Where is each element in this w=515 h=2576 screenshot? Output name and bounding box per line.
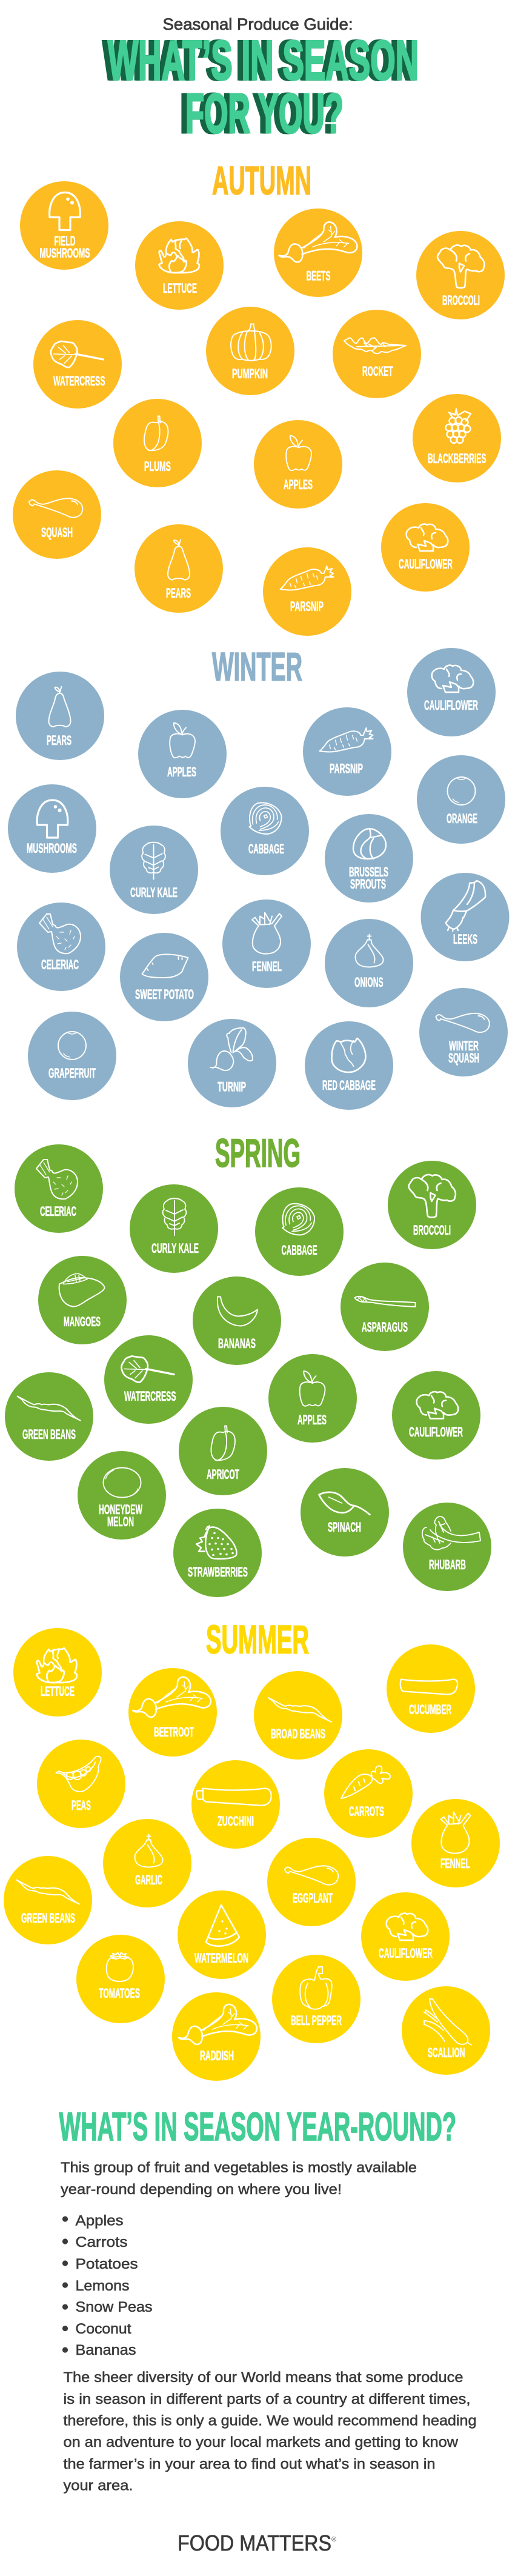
label: FIELD [55, 233, 75, 249]
icon: mushroom [37, 800, 68, 838]
item: cauliflower [361, 1892, 450, 1981]
item: cabbage [255, 1187, 344, 1276]
icon: raddish [179, 2004, 257, 2044]
item: apples [138, 710, 227, 798]
icon: cucumber [400, 1679, 457, 1695]
label: CARROTS [349, 1804, 384, 1819]
icon: cauliflower [387, 1914, 428, 1940]
icon: apple [170, 722, 195, 758]
section: spring [5, 1130, 491, 1597]
label: WATERCRESS [124, 1389, 176, 1404]
icon: rocket [344, 338, 406, 353]
icon: brussels sprout [353, 829, 386, 859]
closing paragraph: on an adventure to your local markets and getting to know [63, 2434, 459, 2451]
heading: Spring: SPRING [215, 1130, 301, 1175]
closing paragraph: therefore, this is only a guide. We would recommend heading [63, 2412, 476, 2429]
item: grapefruit [28, 1012, 116, 1100]
item: squash [13, 470, 101, 559]
item: orange [417, 755, 505, 844]
label: CAULIFLOWER [409, 1424, 463, 1440]
item: pears [16, 672, 104, 760]
icon: broccoli [408, 1175, 456, 1217]
item: mangoes [38, 1256, 127, 1344]
label: ONIONS [354, 975, 383, 990]
icon: broad beans [268, 1698, 331, 1722]
label: SQUASH [41, 525, 73, 540]
label: PLUMS [144, 459, 171, 474]
item: tomatoes [76, 1935, 165, 2023]
item: cabbage [221, 787, 309, 875]
item: honeydew melon [78, 1451, 166, 1540]
icon: watercress [121, 1356, 174, 1383]
icon: rhubarb [422, 1517, 480, 1550]
label: APPLES [284, 477, 313, 492]
icon: lettuce [36, 1648, 77, 1683]
logo: Food Matters: FOOD MATTERS [178, 2531, 331, 2555]
item: beets [274, 209, 362, 297]
item: green beans [4, 1856, 92, 1944]
item: broccoli [416, 231, 505, 319]
icon: celeriac [39, 914, 81, 953]
icon: pear [168, 539, 190, 579]
label: ROCKET [362, 364, 393, 379]
label: TOMATOES [99, 1986, 140, 2001]
label: MUSHROOMS [27, 841, 77, 856]
item: field mushrooms [20, 181, 108, 270]
item: pumpkin [206, 307, 294, 395]
section: autumn [13, 158, 505, 636]
label: CAULIFLOWER [399, 556, 453, 572]
heading: Winter: WINTER [212, 644, 302, 689]
item: turnip [188, 1019, 276, 1107]
label: PEARS [47, 733, 71, 748]
item: plums [113, 399, 202, 487]
item: fennel [222, 899, 311, 988]
label: CURLY KALE [130, 885, 178, 900]
item: asparagus [341, 1263, 429, 1351]
label: FENNEL [252, 959, 282, 974]
main title [108, 30, 419, 144]
intro text: year-round depending on where you live! [61, 2181, 342, 2198]
icon: mushroom [50, 193, 80, 230]
icon: asparagus [355, 1296, 416, 1307]
label: CAULIFLOWER [379, 1946, 433, 1961]
item: lettuce [135, 221, 224, 310]
closing paragraph: your area. [63, 2478, 133, 2494]
label: SPROUTS [350, 876, 386, 892]
section: summer [4, 1617, 500, 2081]
closing paragraph: the farmer’s in your area to find out what’s in season in [63, 2456, 436, 2472]
label: RED CABBAGE [322, 1078, 376, 1093]
item: celeriac [15, 1144, 103, 1233]
label: SCALLION [428, 2045, 465, 2060]
heading: Summer: SUMMER [206, 1617, 309, 1662]
label: LETTUCE [163, 281, 197, 296]
icon: cabbage [282, 1204, 314, 1235]
item: sweet potato [120, 933, 208, 1021]
item: raddish [172, 1992, 261, 2081]
bullet list: Coconut [75, 2321, 131, 2337]
icon: eggplant [285, 1866, 338, 1885]
item: brussels sprouts [325, 814, 413, 903]
icon: pumpkin [231, 324, 271, 361]
item: carrots [324, 1749, 413, 1838]
item: watermelon [178, 1890, 266, 1979]
icon: garlic [135, 1834, 163, 1867]
icon: melon [103, 1468, 141, 1497]
label: GRAPEFRUIT [48, 1066, 96, 1081]
icon: lettuce [159, 238, 199, 273]
item: winter squash [419, 988, 508, 1076]
bullet list [62, 2212, 153, 2358]
label: LETTUCE [41, 1684, 75, 1699]
label: GARLIC [135, 1872, 162, 1887]
label: PUMPKIN [232, 366, 268, 381]
icon: orange [447, 777, 475, 805]
label: WINTER [449, 1038, 479, 1053]
icon: leek [446, 881, 485, 931]
label: SPINACH [328, 1520, 361, 1535]
item: beetroot [128, 1668, 217, 1757]
item: green beans [5, 1372, 93, 1461]
item: pears [135, 524, 223, 613]
bullet list: Potatoes [75, 2256, 138, 2272]
item: red cabbage [305, 1021, 393, 1110]
item: leeks [420, 873, 509, 961]
item: parsnip [263, 547, 351, 636]
icon: cauliflower [432, 666, 473, 692]
label: WATERCRESS [53, 373, 105, 389]
item: peas [37, 1740, 125, 1828]
label: MUSHROOMS [40, 245, 90, 261]
icon: carrot [341, 1766, 390, 1798]
item: broad beans [254, 1671, 342, 1760]
icon: cabbage [250, 802, 282, 834]
label: CELERIAC [40, 1204, 76, 1219]
label: FENNEL [440, 1856, 470, 1871]
item: cauliflower [381, 503, 470, 592]
icon: grapefruit [58, 1032, 86, 1059]
item: bell pepper [272, 1955, 360, 2043]
label: BELL PEPPER [291, 2013, 342, 2028]
icon: zucchini [196, 1788, 271, 1806]
bullet list: Carrots [75, 2234, 127, 2251]
closing paragraph: The sheer diversity of our World means that some produce [63, 2369, 463, 2386]
label: BROCCOLI [442, 293, 480, 308]
item: bananas [193, 1276, 281, 1365]
label: EGGPLANT [293, 1890, 333, 1906]
label: BANANAS [218, 1336, 256, 1351]
item: parsnip [303, 707, 391, 796]
icon: beets [279, 222, 357, 262]
label: BRUSSELS [349, 864, 388, 879]
icon: watercress [51, 341, 103, 367]
icon: celeriac [36, 1160, 78, 1199]
icon: green beans [17, 1396, 80, 1421]
icon: cauliflower [407, 524, 448, 551]
icon: bell pepper [300, 1967, 332, 2009]
icon: tomato [107, 1952, 133, 1981]
icon: fennel [441, 1812, 470, 1854]
label: HONEYDEW [99, 1502, 142, 1517]
icon: beetroot [133, 1677, 211, 1717]
item: rocket [333, 310, 421, 398]
label: ZUCCHINI [218, 1814, 254, 1829]
label: STRAWBERRIES [188, 1564, 248, 1580]
label: GREEN BEANS [22, 1427, 76, 1442]
icon: broccoli [437, 245, 484, 288]
icon: turnip [211, 1028, 253, 1070]
label: BEETROOT [154, 1724, 194, 1740]
icon: blackberry [446, 409, 471, 443]
icon: spinach [319, 1492, 370, 1515]
label: BROCCOLI [413, 1223, 451, 1238]
item: rhubarb [403, 1503, 491, 1591]
label: APPLES [167, 764, 196, 779]
bullet list: Snow Peas [75, 2299, 153, 2315]
item: onions [325, 919, 413, 1007]
label: CUCUMBER [409, 1702, 451, 1717]
label: BROAD BEANS [271, 1726, 325, 1741]
bullet list: Bananas [75, 2342, 136, 2358]
item: watercress [104, 1335, 193, 1424]
item: curly kale [130, 1184, 218, 1273]
item: scallion [402, 1986, 490, 2075]
label: ORANGE [447, 811, 477, 826]
icon: onion [355, 935, 384, 967]
label: PEAS [71, 1798, 91, 1813]
item: curly kale [110, 826, 198, 914]
icon: apple [300, 1371, 325, 1406]
section: winter [8, 644, 509, 1110]
label: PARSNIP [330, 761, 363, 776]
icon: squash [29, 498, 82, 518]
main title: FOR YOU? [185, 82, 344, 144]
item: celeriac [17, 903, 105, 991]
heading: Autumn: AUTUMN [212, 158, 311, 202]
icon: fennel [252, 913, 282, 954]
item: eggplant [267, 1838, 356, 1926]
item: lettuce [13, 1628, 102, 1717]
label: PEARS [166, 586, 191, 601]
icon: plum [144, 416, 168, 450]
item: fennel [411, 1799, 500, 1887]
icon: watermelon [206, 1905, 239, 1946]
intro text: This group of fruit and vegetables is mostly available [61, 2160, 417, 2176]
bullet list: Lemons [75, 2278, 130, 2294]
label: RHUBARB [429, 1557, 466, 1572]
label: BEETS [307, 268, 331, 284]
icon: parsnip [320, 728, 373, 752]
item: apples [268, 1354, 357, 1443]
icon: banana [218, 1297, 258, 1326]
icon: sweet potato [142, 954, 188, 978]
bullet list: Apples [75, 2212, 124, 2229]
icon: squash [436, 1013, 490, 1032]
label: SQUASH [448, 1050, 479, 1066]
label: MANGOES [64, 1314, 101, 1329]
item: spinach [301, 1468, 389, 1557]
label: MELON [107, 1514, 134, 1529]
icon: red cabbage [332, 1038, 366, 1072]
label: SWEET POTATO [135, 987, 194, 1002]
label: CELERIAC [41, 957, 79, 972]
item: mushrooms [8, 784, 96, 873]
item: apricot [179, 1407, 267, 1495]
label: LEEKS [453, 932, 477, 947]
item: strawberries [173, 1509, 262, 1597]
icon: strawberry [196, 1526, 236, 1559]
icon: cauliflower [417, 1392, 458, 1418]
label: CABBAGE [248, 841, 284, 856]
label: CURLY KALE [151, 1241, 199, 1256]
icon: apricot [211, 1426, 235, 1460]
item: cauliflower [392, 1371, 480, 1460]
item: cauliflower [407, 648, 496, 736]
label: PARSNIP [290, 599, 324, 614]
label: TURNIP [218, 1079, 246, 1095]
item: apples [254, 420, 342, 509]
item: zucchini [191, 1760, 280, 1849]
icon: mango [59, 1273, 105, 1307]
icon: peas [56, 1757, 101, 1792]
subtitle: Seasonal Produce Guide: Seasonal Produce Guide: [162, 15, 353, 33]
label: WATERMELON [194, 1950, 248, 1966]
item: watercress [33, 320, 122, 409]
item: cucumber [387, 1644, 475, 1733]
label: RADDISH [200, 2048, 234, 2063]
icon: pear [48, 687, 70, 727]
item: blackberries [413, 394, 501, 482]
item: broccoli [388, 1161, 476, 1249]
label: ASPARAGUS [362, 1320, 408, 1335]
icon: green beans [16, 1880, 79, 1904]
label: APPLES [297, 1412, 327, 1427]
icon: parsnip [280, 566, 333, 590]
label: GREEN BEANS [21, 1910, 75, 1926]
icon: scallion [424, 1999, 471, 2045]
label: APRICOT [207, 1467, 239, 1482]
icon: kale [142, 843, 165, 879]
logo: Food Matters: ® [331, 2536, 336, 2543]
label: CABBAGE [281, 1243, 317, 1258]
closing paragraph: is in season in different parts of a country at different times, [63, 2391, 470, 2407]
item: garlic [103, 1819, 191, 1907]
icon: apple [286, 435, 311, 470]
icon: kale [163, 1198, 186, 1235]
